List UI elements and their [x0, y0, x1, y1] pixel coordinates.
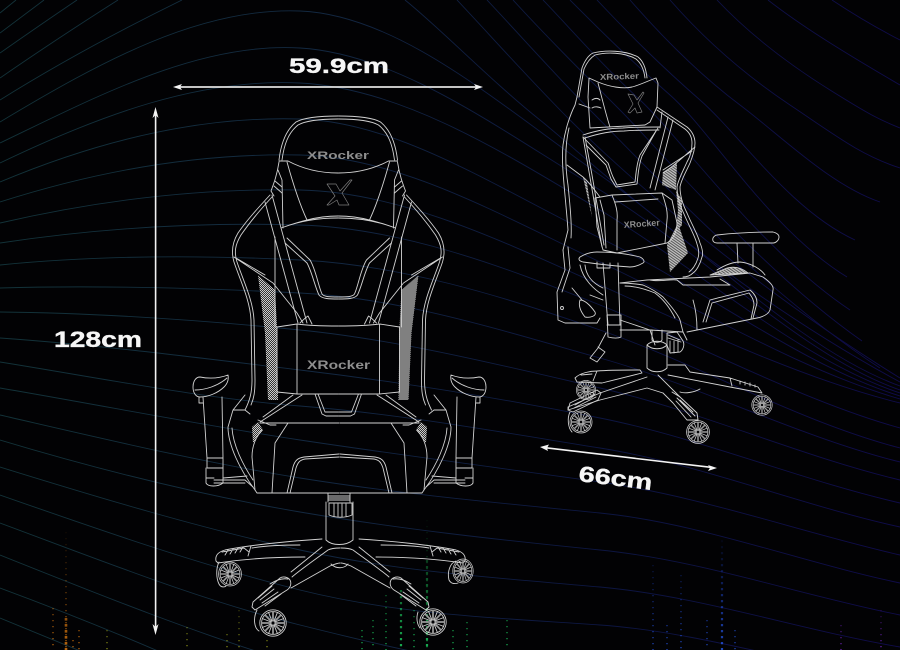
icon: front headrest X	[327, 180, 352, 205]
side chair backrest	[562, 51, 703, 277]
side chair casters	[568, 380, 772, 443]
front view chair	[193, 116, 486, 636]
logo: side headrest: XRocker	[600, 71, 640, 82]
side chair seat	[620, 262, 773, 345]
side chair armrests	[579, 232, 779, 338]
front chair backrest	[232, 116, 444, 416]
label: 66cm: 66cm	[577, 461, 654, 495]
label: 59.9cm: 59.9cm	[289, 54, 389, 78]
logo: front lumbar: XRocker	[307, 360, 371, 372]
arrow: height	[152, 107, 158, 635]
front chair seat and armrests	[193, 375, 486, 493]
logo: front headrest: XRocker	[307, 150, 370, 162]
front chair gas lift and base	[216, 493, 465, 610]
front chair casters	[217, 559, 473, 636]
side view chair	[557, 51, 779, 443]
arrow: width	[173, 84, 483, 90]
side chair gas lift	[647, 330, 684, 372]
label: 128cm: 128cm	[54, 327, 142, 352]
arrow: depth	[540, 444, 717, 471]
dotted equaliser columns	[53, 520, 881, 650]
logo: side lumbar: XRocker	[623, 217, 661, 230]
side chair base	[568, 365, 762, 420]
side chair rear bracket	[557, 247, 652, 362]
icon: side headrest X	[628, 92, 644, 113]
